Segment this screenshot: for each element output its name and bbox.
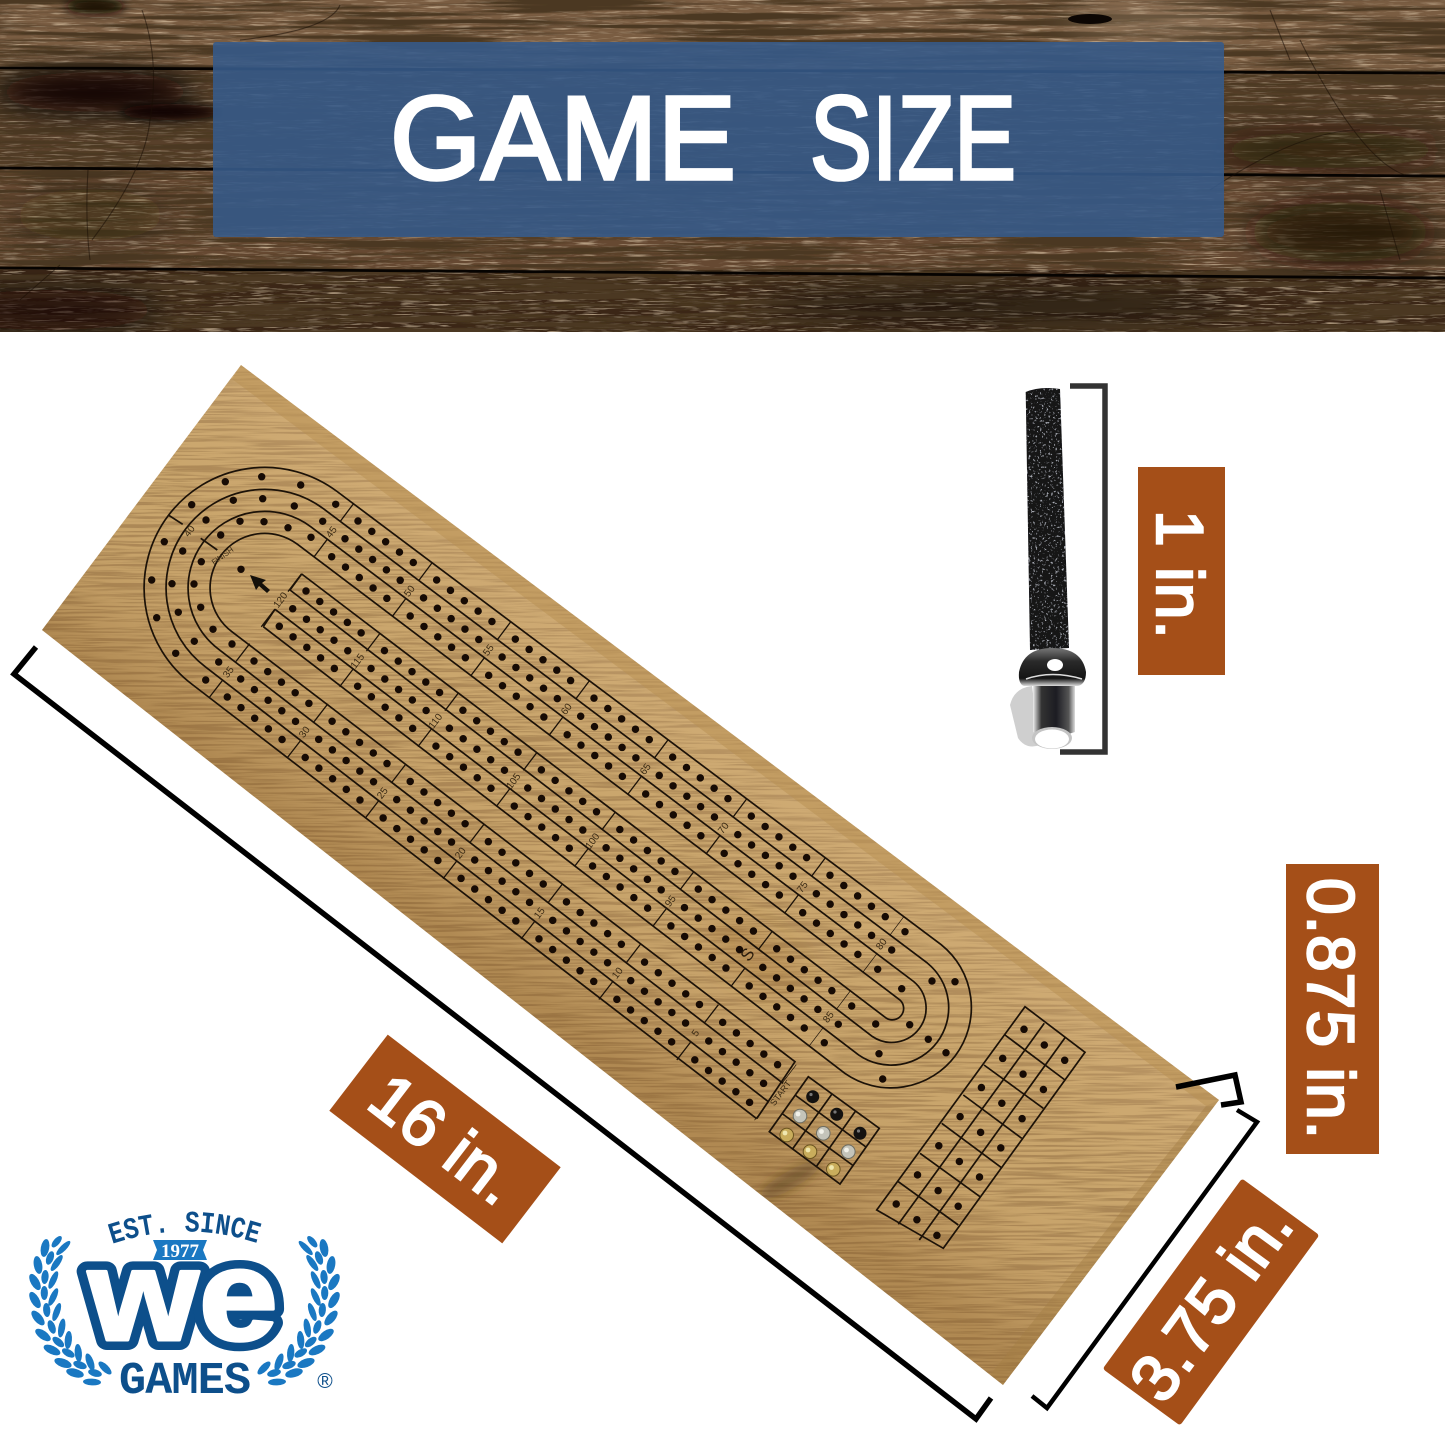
callout: 1 in.: 1 in. [1143, 510, 1217, 640]
score numbers: 20 [453, 845, 469, 861]
score numbers: 35 [221, 664, 237, 680]
score numbers: 105 [505, 771, 524, 791]
est since arc text: EST. SINCE [108, 1212, 262, 1244]
logo: WE Games [29, 1212, 340, 1407]
score numbers: 45 [324, 524, 340, 540]
score numbers: START [768, 1078, 794, 1108]
arrow bracket: 1 in. peg height [1060, 386, 1105, 752]
score numbers: 25 [375, 785, 391, 801]
arrow bracket: 0.875 in. thickness [1176, 1075, 1241, 1105]
title text: SIZE [810, 72, 1016, 205]
extra scoring grid [877, 1007, 1085, 1248]
callout: 1 in. [1138, 467, 1225, 675]
score numbers: 75 [795, 879, 811, 895]
callout: 0.875 in.: 0.875 in. [1294, 878, 1368, 1140]
callout: 3.75 in.: 3.75 in. [1115, 1190, 1307, 1414]
peg holes in nine straight rows [227, 521, 886, 1103]
title text: GAME [390, 72, 736, 205]
score numbers: S [737, 944, 759, 965]
callout: 16 in.: 16 in. [356, 1059, 534, 1219]
arrow bracket: 3.75 in. width [1032, 1110, 1257, 1408]
callout: 16 in. [329, 1035, 561, 1243]
score numbers: 95 [663, 893, 679, 909]
score numbers: FINISH [210, 545, 235, 567]
score numbers: 80 [874, 936, 890, 952]
score numbers: 100 [584, 831, 603, 851]
score numbers: 10 [610, 965, 626, 981]
peg storage grid [769, 1077, 879, 1184]
score numbers: 15 [532, 905, 548, 921]
arrow bracket: 16 in. length [14, 647, 991, 1419]
score numbers [182, 523, 890, 1108]
cribbage board [42, 365, 1219, 1385]
icon: scoring peg [1010, 388, 1086, 749]
registered mark: ® [317, 1370, 333, 1393]
section dividers [216, 512, 897, 1112]
title banner [213, 42, 1224, 237]
score numbers: 60 [559, 701, 575, 717]
icon: finish arrow [250, 575, 270, 593]
1977 ribbon [153, 1240, 207, 1260]
peg holes in curved ends [148, 473, 959, 1083]
laurel right [255, 1234, 342, 1386]
score numbers: 110 [427, 711, 445, 731]
score numbers: 40 [182, 523, 198, 539]
score numbers: 30 [297, 724, 313, 740]
score numbers: 50 [402, 583, 418, 599]
wood plank header background [0, 0, 1445, 332]
laurel left [27, 1234, 114, 1386]
score numbers: 115 [349, 651, 367, 671]
WE wordmark: we [87, 1222, 278, 1368]
score numbers: 5 [690, 1028, 702, 1039]
score numbers: 65 [638, 761, 654, 777]
GAMES wordmark: GAMES [119, 1356, 251, 1407]
track outlines [144, 467, 971, 1119]
score numbers: 120 [272, 590, 291, 610]
score numbers: 85 [821, 1009, 837, 1025]
1977 text: 1977 [161, 1241, 200, 1262]
WE wordmark: we [87, 1222, 278, 1368]
score numbers: 55 [481, 642, 497, 658]
pegs [780, 1090, 866, 1176]
score numbers: 70 [716, 820, 732, 836]
